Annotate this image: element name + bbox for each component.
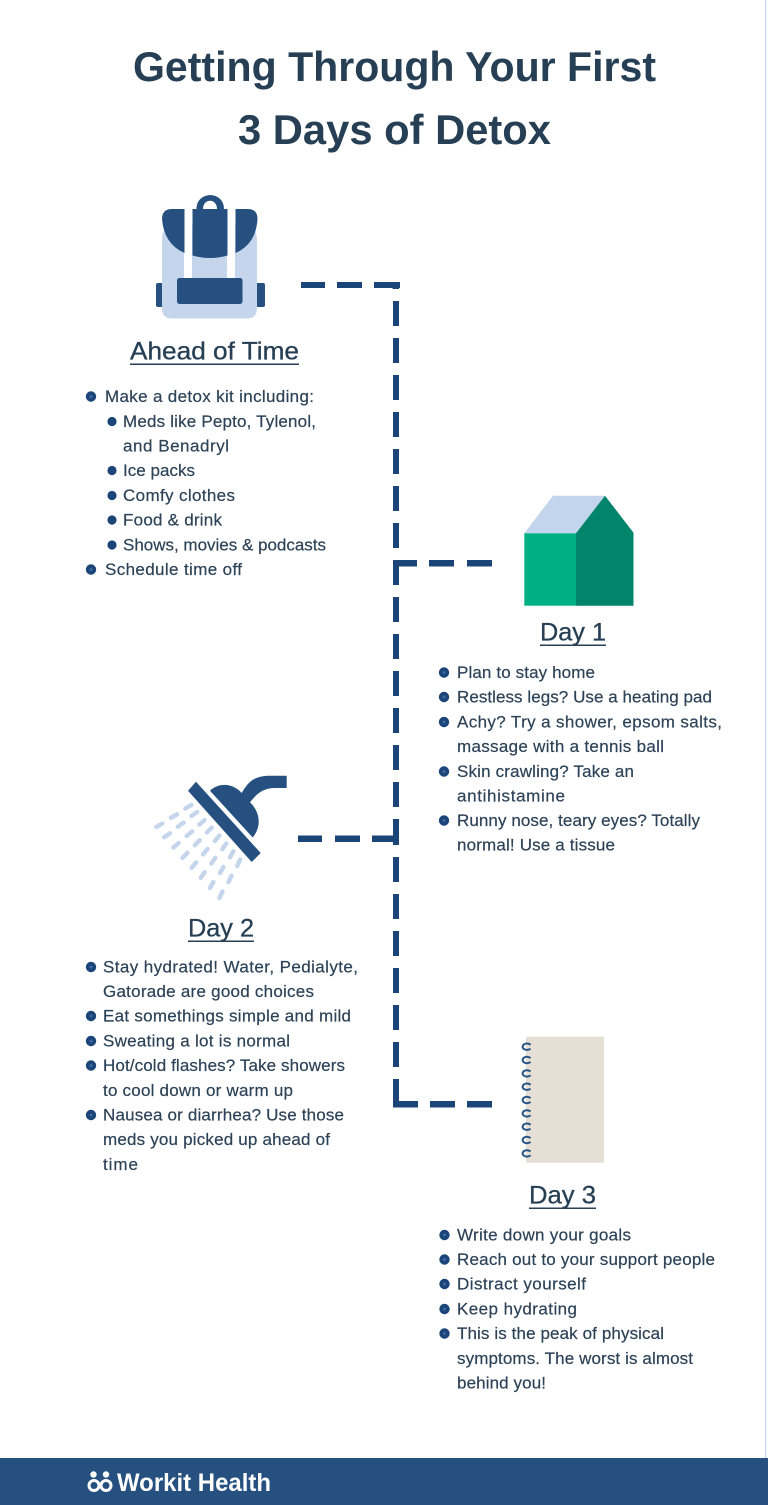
title: 3 Days of Detox: [238, 106, 552, 153]
list: Ahead of Time: and Benadryl: [123, 436, 229, 456]
list: Day 2: Stay hydrated! Water, Pedialyte,: [103, 958, 358, 976]
list: Ahead of Time: Food & drink: [123, 510, 222, 530]
list: Day 1: [439, 663, 722, 854]
list: Ahead of Time: [86, 387, 326, 579]
list: Day 1: Skin crawling? Take an: [457, 762, 634, 781]
list: Day 1: antihistamine: [457, 786, 565, 806]
list: Day 3: Write down your goals: [457, 1226, 631, 1244]
list: Day 3: Reach out to your support people: [457, 1250, 715, 1269]
list: Day 2: Sweating a lot is normal: [103, 1032, 290, 1050]
heading: Day 2: Day 2: [188, 914, 254, 942]
list: Day 2: Hot/cold flashes? Take showers: [103, 1056, 345, 1075]
title: [133, 43, 656, 153]
icon: house: [524, 496, 634, 606]
list: Ahead of Time: Make a detox kit including:: [105, 387, 314, 406]
list: Day 1: massage with a tennis ball: [457, 737, 664, 756]
list: Day 2: Gatorade are good choices: [103, 982, 314, 1001]
list: Day 1: Restless legs? Use a heating pad: [457, 688, 712, 706]
list: Day 1: normal! Use a tissue: [457, 836, 615, 854]
list: Day 3: symptoms. The worst is almost: [457, 1349, 693, 1368]
list: Day 3: behind you!: [457, 1374, 546, 1392]
list: Day 2: Nausea or diarrhea? Use those: [103, 1106, 344, 1124]
list: Day 2: meds you picked up ahead of: [103, 1130, 330, 1149]
title: Getting Through Your First: [133, 43, 656, 90]
list: Day 3: [439, 1226, 715, 1392]
list: Ahead of Time: Schedule time off: [105, 560, 242, 579]
icon: shower head: [156, 776, 287, 898]
list: Day 2: [86, 958, 358, 1174]
list: Ahead of Time: Ice packs: [123, 461, 195, 480]
list: Day 1: Achy? Try a shower, epsom salts,: [457, 712, 722, 732]
list: Day 2: Eat somethings simple and mild: [103, 1006, 351, 1026]
list: Day 3: Keep hydrating: [457, 1300, 577, 1318]
heading: Ahead of Time: Ahead of Time: [130, 338, 299, 366]
list: Ahead of Time: Meds like Pepto, Tylenol,: [123, 412, 316, 431]
list: Ahead of Time: Shows, movies & podcasts: [123, 536, 326, 554]
list: Day 2: time: [103, 1155, 138, 1174]
heading: Day 1: Day 1: [540, 618, 606, 646]
footer bar: [0, 1458, 768, 1505]
logo: Workit Health: Workit Health: [117, 1469, 271, 1497]
list: Day 3: This is the peak of physical: [457, 1324, 664, 1343]
heading: Day 3: Day 3: [529, 1182, 596, 1210]
icon: backpack: [156, 195, 265, 318]
list: Day 2: to cool down or warm up: [103, 1081, 293, 1100]
list: Day 1: Runny nose, teary eyes? Totally: [457, 811, 700, 830]
icon: notebook: [523, 1037, 604, 1163]
list: Day 3: Distract yourself: [457, 1274, 586, 1294]
list: Ahead of Time: Comfy clothes: [123, 486, 235, 505]
list: Day 1: Plan to stay home: [457, 663, 595, 682]
dashed timeline connector: [298, 282, 492, 1108]
